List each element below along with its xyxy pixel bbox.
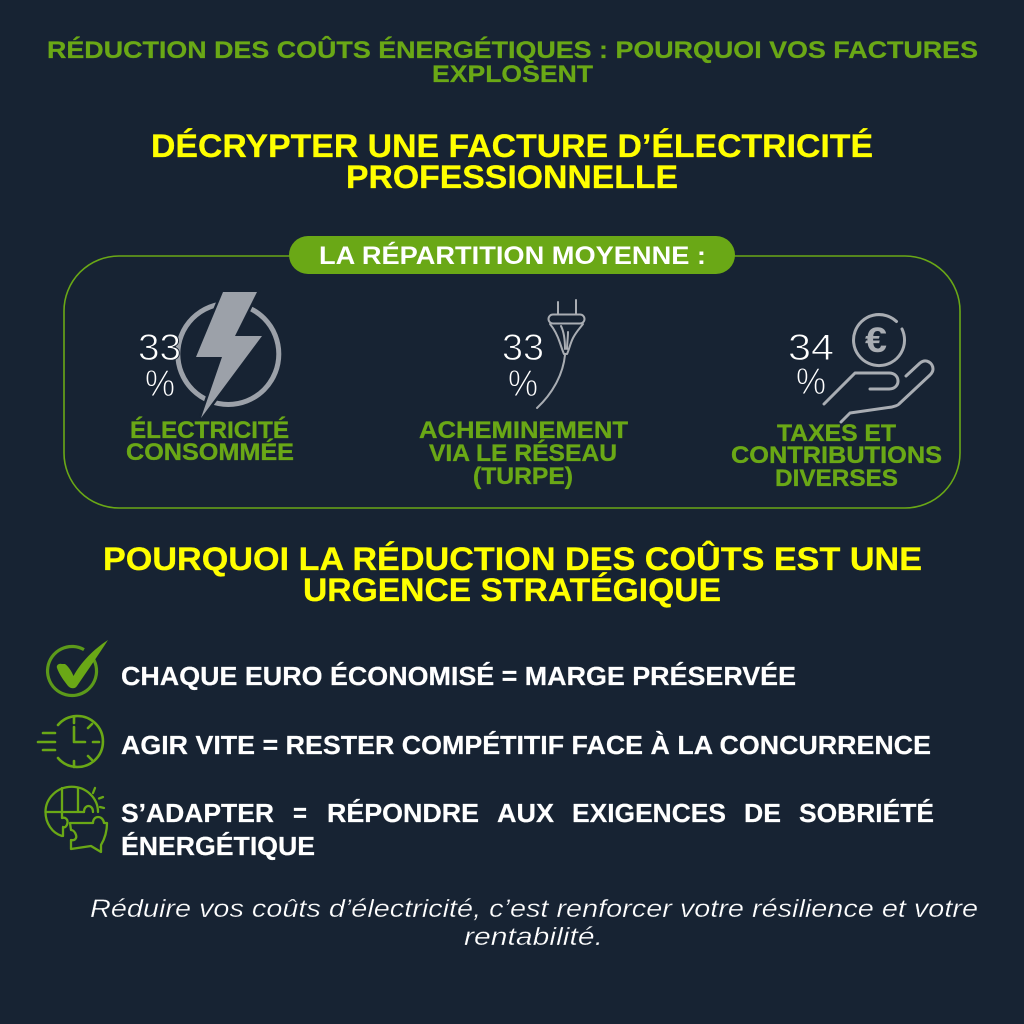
stat: 33 % electricity: 33 <box>138 327 181 368</box>
stat: 34 % taxes: 34 <box>788 327 834 368</box>
closing statement: Réduire vos coûts d’électricité, c’est renforcer votre résilience et votre <box>90 895 978 923</box>
icon: hand holding euro coin: € <box>865 321 887 360</box>
icon: hand holding euro coin <box>824 315 933 422</box>
list item 2: AGIR VITE = RESTER COMPÉTITIF FACE À LA CONCURRENCE <box>121 731 931 760</box>
icon: plug <box>537 300 584 408</box>
heading: décrypter une facture <box>151 128 873 195</box>
label: électricité consommée <box>126 416 294 466</box>
stat: 33 % electricity: % <box>145 363 175 404</box>
label: acheminement: (TURPE) <box>473 463 573 490</box>
title <box>47 36 978 88</box>
label: électricité consommée: ÉLECTRICITÉ <box>130 416 289 444</box>
heading: urgence stratégique <box>103 541 922 608</box>
icon: check mark <box>48 640 108 695</box>
title: EXPLOSENT <box>432 61 593 88</box>
heading: urgence stratégique: URGENCE STRATÉGIQUE <box>303 572 721 608</box>
pill heading: LA RÉPARTITION MOYENNE : <box>319 241 706 270</box>
list item 3: S’ADAPTER <box>121 800 274 828</box>
icon: lightning bolt in circle <box>178 292 279 418</box>
list item 3: SOBRIÉTÉ <box>799 799 934 828</box>
label: acheminement: ACHEMINEMENT <box>419 417 628 444</box>
pill heading <box>289 236 735 274</box>
panel: répartition moyenne <box>64 236 960 508</box>
list item 3: = <box>293 800 307 828</box>
stat: 33 % network: 33 <box>502 327 544 368</box>
list item 3: ÉNERGÉTIQUE <box>121 832 315 861</box>
icon: fast clock <box>38 716 103 767</box>
stat: 34 % taxes: % <box>796 361 826 402</box>
label: taxes et contributions: TAXES ET <box>777 420 896 447</box>
list item 3: RÉPONDRE <box>327 799 479 828</box>
stat: 33 % network <box>502 327 544 404</box>
heading: urgence stratégique: POURQUOI LA RÉDUCTION DES COÛTS EST UNE <box>103 541 922 577</box>
label: taxes et contributions: CONTRIBUTIONS <box>731 442 942 469</box>
title: RÉDUCTION DES COÛTS ÉNERGÉTIQUES : POURQUOI VOS FACTURES <box>47 36 978 64</box>
heading: décrypter une facture: PROFESSIONNELLE <box>346 159 678 195</box>
list item 1: CHAQUE EURO ÉCONOMISÉ = MARGE PRÉSERVÉE <box>121 662 796 691</box>
closing statement: rentabilité. <box>464 923 603 951</box>
label: électricité consommée: CONSOMMÉE <box>126 438 294 466</box>
heading: décrypter une facture: DÉCRYPTER UNE FACTURE D’ÉLECTRICITÉ <box>151 128 873 164</box>
list item 3 <box>121 799 934 861</box>
list item 3: AUX <box>497 800 554 828</box>
stat: 34 % taxes <box>788 327 834 402</box>
label: taxes et contributions: DIVERSES <box>775 465 898 492</box>
label: acheminement: VIA LE RÉSEAU <box>429 439 617 467</box>
label: taxes et contributions <box>731 420 942 492</box>
label: acheminement <box>419 417 628 490</box>
stat: 33 % electricity <box>138 327 181 404</box>
closing statement <box>90 895 978 951</box>
list item 3: DE <box>744 800 781 828</box>
list item 3: EXIGENCES <box>572 800 726 828</box>
stat: 33 % network: % <box>508 363 538 404</box>
icon: globe with puzzle piece <box>46 787 107 852</box>
